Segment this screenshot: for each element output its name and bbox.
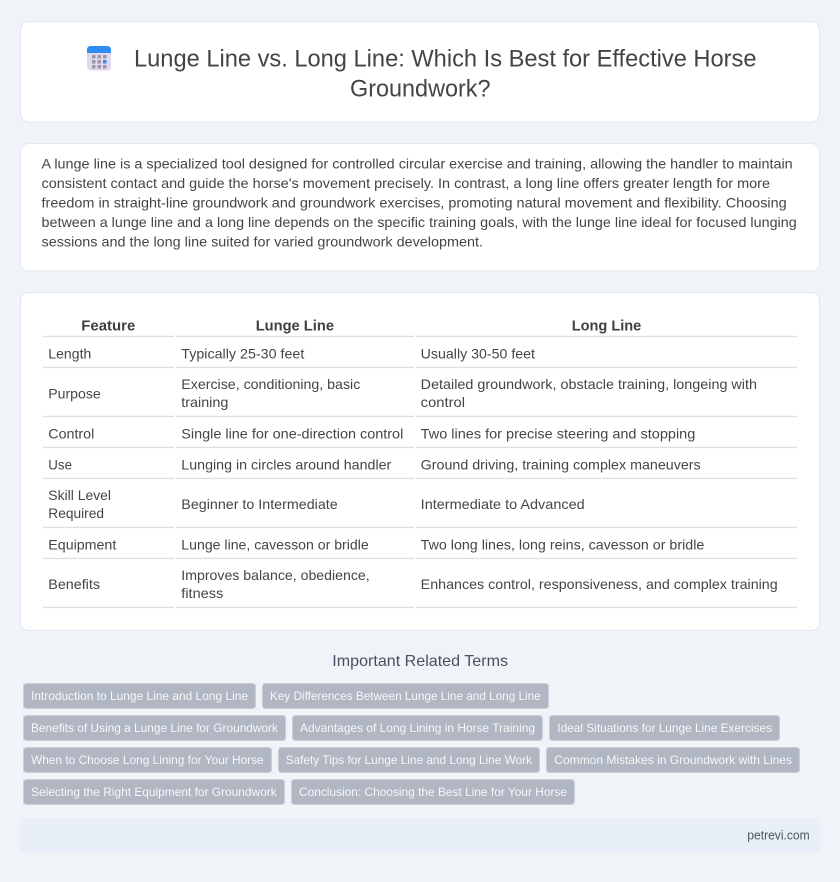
tag [24,684,256,708]
table row: equipment: Equipment [48,536,116,552]
table header row: Lunge Line [256,318,334,335]
table row: use: Lunging in circles around handler [181,456,392,472]
table row: skill level required: Required [48,505,104,521]
tag: Introduction to Lunge Line and Long Line [31,689,248,703]
tag [278,748,540,772]
table header row: Long Line [572,318,641,335]
table row: equipment: Lunge line, cavesson or bridle [181,536,369,552]
table row: benefits [43,567,797,608]
tag [550,716,780,740]
tag [292,716,542,740]
footer credit: petrevi.com [747,827,810,842]
tag: When to Choose Long Lining for Your Horse [31,753,264,767]
tag [546,748,800,772]
tag: Common Mistakes in Groundwork with Lines [554,753,792,767]
title: Groundwork? [350,76,490,102]
panel: comparison table [20,292,820,630]
table header row [43,318,797,337]
table row: length: Usually 30-50 feet [421,345,535,361]
tag: Benefits of Using a Lunge Line for Groundwork [31,721,279,735]
table row: equipment: Two long lines, long reins, cavesson or bridle [421,536,705,552]
tag: Conclusion: Choosing the Best Line for Your Horse [299,785,567,799]
text block: introduction: sessions and the long line suited for varied groundwork development. [42,233,483,249]
table row: purpose [43,376,797,417]
text block: introduction: between a lunge line and a long line depends on the specific training goals, with the lunge line ideal for focused lunging [42,214,797,230]
tag: Key Differences Between Lunge Line and Long Line [270,689,541,703]
table row: purpose: Purpose [48,385,101,401]
footer [20,818,820,852]
table row: purpose: training [181,394,228,410]
table row: skill level required: Beginner to Intermediate [181,496,338,512]
table row: skill level required: Intermediate to Advanced [421,496,585,512]
text block: introduction: freedom in straight-line groundwork and groundwork exercises, promoting natural movement and flexibility. Choosing [42,194,787,210]
title [134,46,756,102]
tag [262,684,548,708]
table row: skill level required [43,487,797,528]
table row: benefits: Improves balance, obedience, [181,567,370,583]
table row: purpose: Detailed groundwork, obstacle training, longeing with [421,376,757,392]
table row: length: Length [48,345,91,361]
tag [24,780,284,804]
table row: benefits: Benefits [48,576,100,592]
tag [292,780,574,804]
tag [24,748,272,772]
table row: use: Ground driving, training complex maneuvers [421,456,701,472]
table row: control: Single line for one-direction control [181,425,403,441]
table row: control: Control [48,425,94,441]
text block: introduction [42,155,797,249]
text block: introduction: consistent contact and guide the horse's movement precisely. In contrast, a long line offers greater length for more [42,175,770,191]
tag: Selecting the Right Equipment for Groundwork [31,785,278,799]
title: Lunge Line vs. Long Line: Which Is Best for Effective Horse [134,46,756,72]
panel: introduction paragraph [20,144,820,271]
table row: use [43,456,797,479]
table row: benefits: fitness [181,585,223,601]
table row: control: Two lines for precise steering and stopping [421,425,695,441]
table row: purpose: Exercise, conditioning, basic [181,376,360,392]
tag [24,716,286,740]
table row: length [43,345,797,368]
table row: use: Use [48,456,72,472]
table row: purpose: control [421,394,465,410]
table row: equipment [43,536,797,559]
table row: benefits: Enhances control, responsiveness, and complex training [421,576,778,592]
tag: Safety Tips for Lunge Line and Long Line Work [286,753,533,767]
table row: control [43,425,797,448]
tag: Ideal Situations for Lunge Line Exercises [557,721,772,735]
tag: Advantages of Long Lining in Horse Training [300,721,535,735]
related terms tags [24,684,800,804]
heading: important related terms: Important Related Terms [332,653,508,670]
table row: length: Typically 25-30 feet [181,345,304,361]
table header row: Feature [81,318,135,335]
text block: introduction: A lunge line is a specialized tool designed for controlled circular exercise and training, allowing the handler to maintain [42,155,793,171]
icon: calendar [87,46,111,70]
panel: header [20,22,820,122]
table row: skill level required: Skill Level [48,487,111,503]
